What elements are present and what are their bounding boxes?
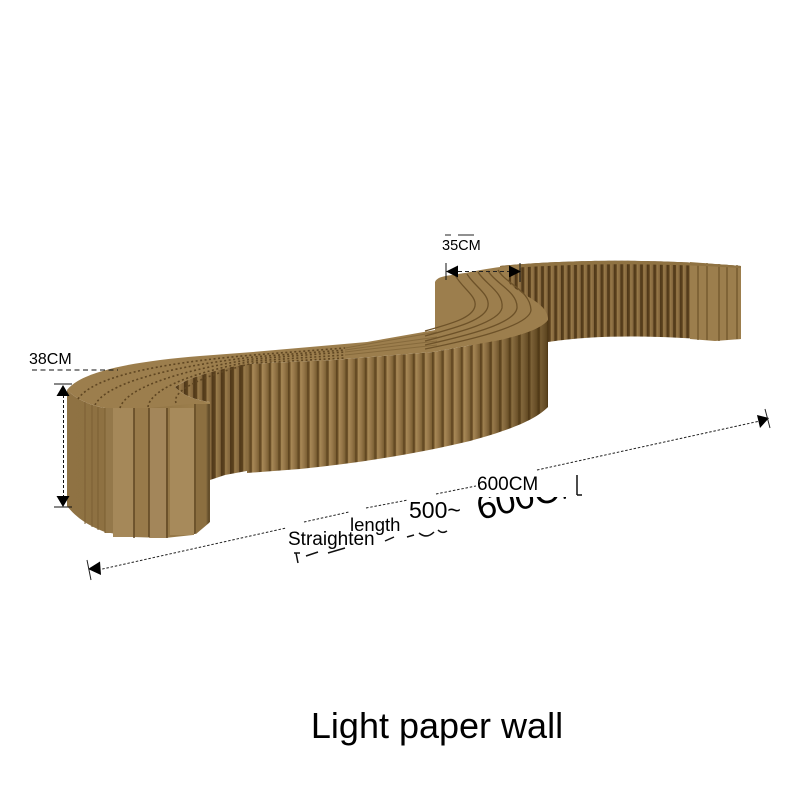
paper wall product [67,261,741,538]
length arrowheads [88,415,769,575]
caption: Light paper wall [311,705,563,746]
infographic canvas [30,234,770,746]
height label: 38CM [29,351,72,368]
clipped ghost text: 600CM [473,463,591,528]
range label: 500~ [409,497,461,523]
raised end of the S curve [435,265,548,345]
dimension: height 38CM [29,351,118,507]
length word: length [350,514,400,535]
far wall section [500,261,741,342]
walking surface of the wall [67,315,548,408]
dimension: straightened length [87,409,770,580]
residual fragments of overprinted label [294,475,582,564]
dashed length line [98,421,760,570]
inner curved wall [175,362,252,480]
dimension: width 35CM [442,235,521,282]
width label: 35CM [442,238,481,254]
main front wall [247,320,548,473]
length labels: 600CM [477,474,538,495]
S curve grooves [425,270,531,349]
straighten word: Straighten [288,529,375,550]
left end wall [67,390,210,538]
